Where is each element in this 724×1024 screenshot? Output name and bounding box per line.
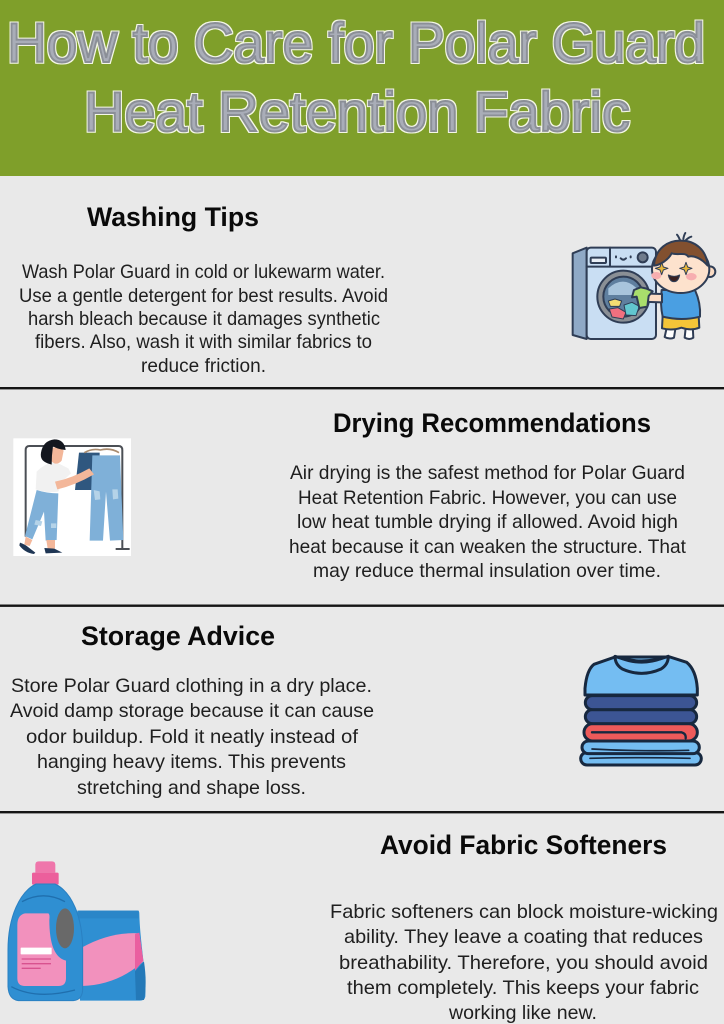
text block: drying: heat because it can weaken the structure. That — [289, 536, 687, 558]
panel: avoid fabric softeners — [8, 830, 718, 1024]
divider — [0, 811, 724, 813]
divider — [0, 604, 724, 607]
header banner — [0, 0, 724, 176]
icon: woman hanging jeans on rack — [13, 438, 131, 556]
text block: storage: hanging heavy items. This prevents — [37, 751, 346, 773]
heading: avoid fabric softeners: Avoid Fabric Softeners — [380, 830, 667, 860]
text block: softeners: breathability. Therefore, you should avoid — [339, 952, 708, 974]
text block: storage: Avoid damp storage because it can cause — [10, 700, 374, 722]
text block: softeners: working like new. — [448, 1002, 597, 1024]
text block: washing tips: Wash Polar Guard in cold or lukewarm water. — [22, 261, 385, 283]
text block: storage: Store Polar Guard clothing in a dry place. — [11, 675, 372, 697]
text block: drying: Heat Retention Fabric. However, you can use — [298, 487, 677, 509]
icon: child loading washing machine — [573, 233, 715, 339]
text block: drying: low heat tumble drying if allowed. Avoid high — [297, 511, 678, 533]
text block: storage: odor buildup. Fold it neatly instead of — [26, 726, 359, 748]
text block: softeners: ability. They leave a coating that reduces — [344, 926, 703, 948]
text block: softeners: them completely. This keeps your fabric — [347, 977, 699, 999]
title: How to Care for Polar Guard — [7, 11, 705, 74]
panel: drying recommendations — [13, 408, 687, 582]
panel: washing tips — [19, 202, 715, 377]
text block: softeners — [330, 901, 718, 1024]
text block: washing tips: harsh bleach because it damages synthetic — [28, 308, 380, 330]
title — [7, 11, 705, 143]
text block: washing tips: fibers. Also, wash it with similar fabrics to — [35, 331, 372, 353]
panel: storage advice — [10, 621, 701, 799]
text block: storage: stretching and shape loss. — [77, 777, 306, 799]
icon: stack of folded clothes — [581, 656, 701, 765]
title: Heat Retention Fabric — [84, 80, 630, 143]
text block: drying: Air drying is the safest method for Polar Guard — [290, 462, 685, 484]
text block: washing tips — [19, 261, 388, 377]
text block: washing tips: Use a gentle detergent for best results. Avoid — [19, 285, 388, 307]
text block: drying: may reduce thermal insulation over time. — [313, 560, 661, 582]
divider — [0, 387, 724, 389]
heading: storage advice: Storage Advice — [81, 621, 275, 651]
heading: washing tips: Washing Tips — [87, 202, 259, 232]
text block: washing tips: reduce friction. — [141, 355, 266, 377]
text block: storage — [10, 675, 374, 799]
icon: detergent bottle and pouch — [8, 861, 146, 1001]
text block: softeners: Fabric softeners can block moisture-wicking — [330, 901, 718, 923]
heading: drying recommendations: Drying Recommendations — [333, 408, 651, 438]
text block: drying — [289, 462, 687, 582]
